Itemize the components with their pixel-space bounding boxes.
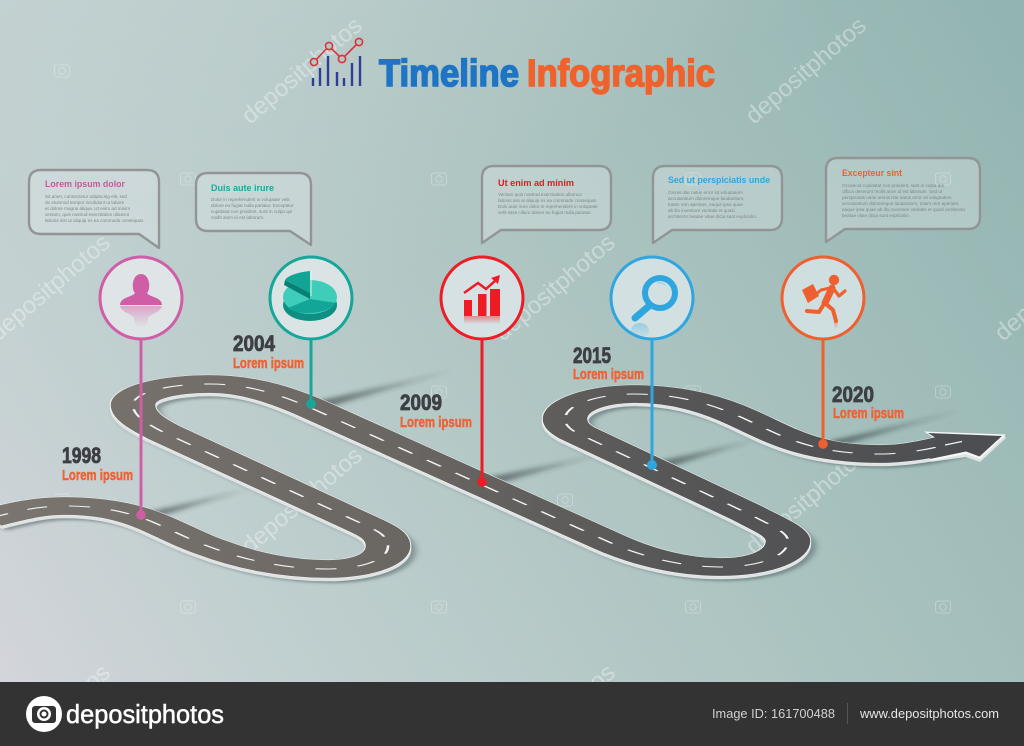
icon: pie chart (283, 271, 337, 321)
speech bubble 2004: Duis aute irure (211, 183, 274, 193)
watermarks: depositphotos (740, 12, 872, 130)
year 2004: Lorem ipsum (233, 356, 304, 372)
road side wall (0, 387, 950, 572)
arrow head surface (928, 433, 1002, 459)
milestone 2004 (196, 173, 352, 409)
road rim (0, 384, 950, 569)
footer url: www.depositphotos.com (859, 707, 999, 721)
year 2015: Lorem ipsum (573, 367, 644, 383)
speech bubble 2020: eaque ipsa quae ab illo inventore veritatis et quasi architecto (842, 207, 966, 212)
year 2009 (400, 390, 472, 431)
speech bubble 2020 (826, 158, 980, 242)
footer bar (0, 682, 1024, 746)
speech bubble 1998: laboris nisi ut aliquip ex ea commodo consequat. (45, 218, 144, 223)
speech bubble 1998: Sit amet, consectetur adipiscing elit, sed (45, 194, 127, 199)
year 2020 (832, 382, 904, 422)
speech bubble 1998: do eiusmod tempor incididunt ut labore (45, 200, 125, 205)
watermarks: depositphotos (236, 12, 368, 130)
speech bubble 2004: dolore eu fugiat nulla pariatur. Excepteur (211, 203, 294, 208)
speech bubble 2009: Duis aute irure dolor in reprehenderit in voluptate (498, 204, 598, 209)
speech bubble 2020: Occaecat cupidatat non proident, sunt in culpa qui (842, 183, 944, 188)
year 2020: 2020 (832, 382, 874, 407)
icon: magnifier (631, 278, 675, 339)
watermarks: depositphotos (489, 229, 621, 347)
footer logo: depositphotos (66, 699, 224, 729)
speech bubble 2020: Excepteur sint (842, 168, 902, 178)
speech bubble 2015: Sed ut perspiciatis unde (668, 175, 770, 185)
year 2020: Lorem ipsum (833, 406, 904, 422)
speech bubble 2020: accusantium doloremque laudantium, totam rem aperiam, (842, 201, 959, 206)
speech bubble 2009: laboris nisi ut aliquip ex ea commodo consequat. (498, 198, 597, 203)
speech bubble 1998: Lorem ipsum dolor (45, 179, 125, 189)
year 2004 (233, 331, 304, 372)
speech bubble 2015 (653, 166, 782, 243)
watermarks: depositphotos (236, 442, 368, 560)
year 2004: 2004 (233, 331, 276, 356)
year 1998: 1998 (62, 443, 101, 468)
speech bubble 2015: Omnis iste natus error sit voluptatem (668, 190, 743, 195)
year 1998: Lorem ipsum (62, 468, 133, 484)
road (0, 384, 1006, 574)
speech bubble 2009: Veniam quis nostrud exercitation ullamco (498, 192, 582, 197)
road shadow (0, 389, 955, 574)
speech bubble 2009 (482, 166, 611, 243)
year 1998 (62, 443, 133, 484)
title icon: bar chart with line (310, 38, 363, 86)
speech bubble 1998: veniam, quis nostrud exercitation ullamco (45, 212, 130, 217)
speech bubble 2020: officia deserunt mollit anim id est laborum. Sed ut (842, 189, 943, 194)
speech bubble 1998 (29, 170, 159, 248)
title (379, 53, 715, 95)
speech bubble 2020: beatae vitae dicta sunt explicabo. (842, 213, 910, 218)
milestone 1998 (29, 170, 182, 520)
icon: running businessman (802, 275, 845, 329)
title: Timeline (379, 53, 519, 95)
speech bubble 2015: totam rem aperiam, eaque ipsa quae (668, 202, 744, 207)
icon: rising bar chart (464, 275, 500, 324)
milestone 2009 (400, 166, 611, 487)
year 2015: 2015 (573, 343, 611, 368)
speech bubble 2009: velit esse cillum dolore eu fugiat nulla pariatur. (498, 210, 592, 215)
milestone 2015 (573, 166, 782, 470)
speech bubble 1998: et dolore magna aliqua. Ut enim ad minim (45, 206, 130, 211)
year 2009: 2009 (400, 390, 442, 415)
milestone 2020 (782, 158, 980, 449)
speech bubble 2020: perspiciatis unde omnis iste natus error sit voluptatem (842, 195, 952, 200)
footer logo (26, 696, 224, 732)
road centre dashes (0, 384, 950, 569)
pin 2009 (441, 257, 523, 487)
arrow head dash (945, 442, 962, 445)
pin 2020 (782, 257, 864, 449)
speech bubble 2015: architecto beatae vitae dicta sunt explicabo. (668, 214, 757, 219)
title: Infographic (527, 53, 715, 95)
pin 2015 (611, 257, 693, 470)
speech bubble 2009: Ut enim ad minim (498, 178, 574, 188)
pin 2004 (270, 257, 352, 409)
speech bubble 2004: mollit anim id est laborum. (211, 215, 264, 220)
speech bubble 2015: ab illo inventore veritatis et quasi (668, 208, 735, 213)
road surface (0, 384, 950, 569)
speech bubble 2004: cupidatat non proident, sunt in culpa qui (211, 209, 292, 214)
speech bubble 2004 (196, 173, 311, 245)
arrow head side wall (930, 435, 1006, 462)
year 2015 (573, 343, 644, 383)
speech bubble 2015: accusantium doloremque laudantium, (668, 196, 744, 201)
pin 1998 (100, 257, 182, 520)
shadows of the pins on the ground (148, 370, 962, 519)
footer image id: Image ID: 161700488 (712, 707, 835, 721)
speech bubble 2004: Dolor in reprehenderit in voluptate velit (211, 197, 290, 202)
year 2009: Lorem ipsum (400, 415, 472, 431)
watermarks: depositphotos (740, 442, 872, 560)
arrow head rim (924, 432, 1006, 461)
